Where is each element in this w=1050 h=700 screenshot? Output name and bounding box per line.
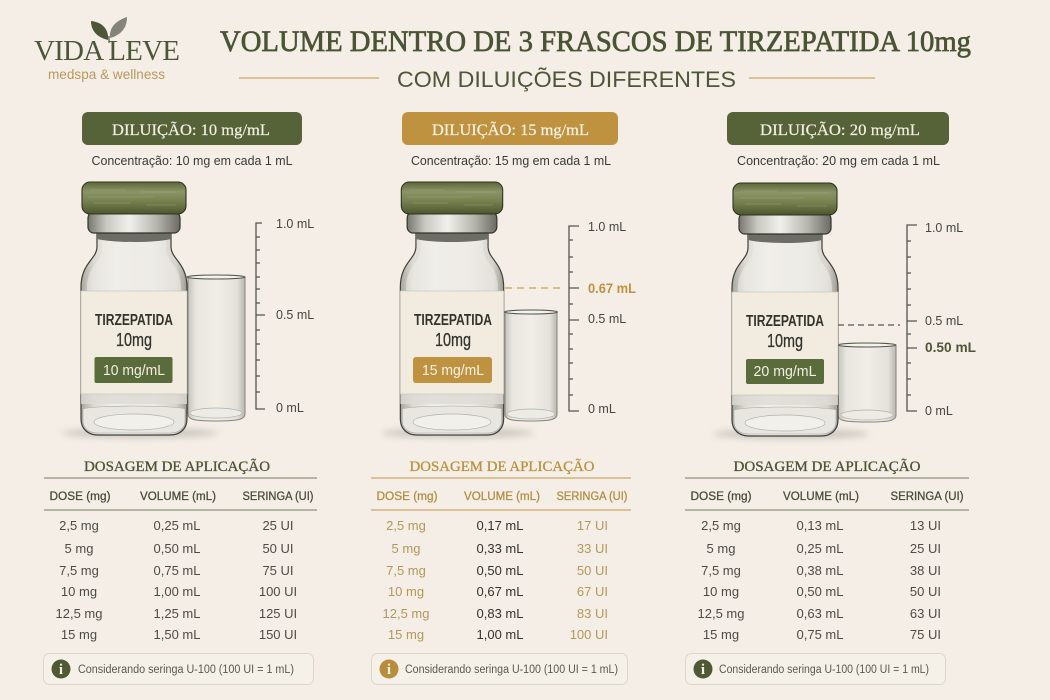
icon: info: i bbox=[387, 662, 391, 678]
panel: dilution 15 mg/mL bbox=[371, 112, 636, 684]
table rows: 0,63 mL bbox=[797, 606, 843, 621]
concentration text: Concentração: 15 mg em cada 1 mL bbox=[411, 154, 611, 168]
icon: info: i bbox=[59, 662, 63, 678]
table rows: 50 UI bbox=[910, 584, 941, 599]
volume scale: 0.50 mL bbox=[925, 340, 976, 355]
table rows: 10 mg bbox=[703, 584, 739, 599]
concentration text: Concentração: 10 mg em cada 1 mL bbox=[92, 154, 293, 168]
table rows: 75 UI bbox=[262, 563, 294, 578]
table rows: 0,25 mL bbox=[797, 541, 843, 556]
note: syringe: Considerando seringa U-100 (100 UI = 1 mL) bbox=[78, 664, 294, 676]
concentration text: Concentração: 20 mg em cada 1 mL bbox=[737, 154, 940, 168]
table rows bbox=[383, 518, 608, 642]
panel: dilution 10 mg/mL bbox=[44, 112, 317, 684]
table rows: 15 mg bbox=[61, 627, 97, 642]
table rows: 0,75 mL bbox=[154, 563, 200, 578]
table rows: 125 UI bbox=[259, 606, 297, 621]
brand tagline: medspa & wellness bbox=[48, 66, 165, 82]
vial label bbox=[94, 312, 173, 383]
table rows: 12,5 mg bbox=[383, 606, 429, 621]
table rows: 0,50 mL bbox=[477, 563, 523, 578]
volume scale: 1.0 mL bbox=[276, 217, 314, 231]
table rows: 75 UI bbox=[910, 627, 941, 642]
vial label: TIRZEPATIDA bbox=[746, 313, 824, 330]
table header: DOSE (mg) bbox=[50, 491, 111, 503]
table rows: 100 UI bbox=[570, 627, 608, 642]
table title: DOSAGEM DE APLICAÇÃO bbox=[84, 459, 270, 475]
table rows: 33 UI bbox=[577, 541, 608, 556]
table rows: 0,83 mL bbox=[477, 606, 523, 621]
volume scale: 1.0 mL bbox=[925, 221, 963, 235]
note: syringe bbox=[44, 654, 314, 684]
table rows: 5 mg bbox=[707, 541, 735, 556]
volume scale: 0 mL bbox=[276, 401, 304, 415]
title: VOLUME DENTRO DE 3 FRASCOS DE TIRZEPATIDA 10mg bbox=[220, 25, 971, 58]
table rows: 0,38 mL bbox=[797, 563, 843, 578]
brand name: VIDA LEVE bbox=[34, 35, 180, 67]
table rows: 25 UI bbox=[262, 518, 294, 533]
table rows: 0,25 mL bbox=[154, 518, 200, 533]
icon: leaves bbox=[91, 17, 127, 43]
table rows: 25 UI bbox=[910, 541, 941, 556]
dilution heading bbox=[82, 112, 302, 145]
table rows: 2,5 mg bbox=[59, 518, 99, 533]
vial label: 10 mg/mL bbox=[103, 362, 165, 379]
icon: info bbox=[380, 660, 398, 678]
volume scale bbox=[907, 221, 976, 418]
icon: info bbox=[694, 660, 712, 678]
vial label: 10mg bbox=[116, 330, 152, 350]
volume scale: 0.5 mL bbox=[588, 312, 626, 326]
icon: info: i bbox=[701, 662, 705, 678]
beaker bbox=[187, 275, 245, 421]
table rows: 15 mg bbox=[388, 627, 424, 642]
table title: DOSAGEM DE APLICAÇÃO bbox=[734, 459, 920, 475]
vial label: 10mg bbox=[767, 331, 803, 351]
dilution heading: DILUIÇÃO: 15 mg/mL bbox=[432, 121, 589, 139]
volume scale: 1.0 mL bbox=[588, 220, 626, 234]
table header: VOLUME (mL) bbox=[140, 491, 216, 503]
dosage table bbox=[44, 459, 317, 642]
table rows: 0,17 mL bbox=[477, 518, 523, 533]
table header: VOLUME (mL) bbox=[464, 491, 540, 503]
vial label: TIRZEPATIDA bbox=[414, 312, 492, 329]
table rows: 50 UI bbox=[577, 563, 608, 578]
table rows: 10 mg bbox=[388, 584, 424, 599]
table rows: 0,67 mL bbox=[477, 584, 523, 599]
volume scale: 0.67 mL bbox=[588, 281, 636, 296]
panel: dilution 20 mg/mL bbox=[685, 112, 976, 684]
table rows: 12,5 mg bbox=[56, 606, 102, 621]
dashed level line bbox=[838, 324, 900, 326]
vial bbox=[382, 182, 534, 438]
vial bbox=[713, 183, 869, 439]
volume scale: 0.5 mL bbox=[276, 308, 314, 322]
dilution heading: DILUIÇÃO: 10 mg/mL bbox=[112, 121, 270, 139]
table rows: 17 UI bbox=[577, 518, 608, 533]
subtitle: COM DILUIÇÕES DIFERENTES bbox=[397, 67, 736, 92]
table rows: 2,5 mg bbox=[701, 518, 741, 533]
volume scale: 0 mL bbox=[925, 404, 953, 418]
table header bbox=[690, 491, 964, 503]
note: syringe bbox=[686, 654, 946, 684]
dilution heading bbox=[402, 112, 618, 145]
table rows: 7,5 mg bbox=[59, 563, 99, 578]
table rows: 7,5 mg bbox=[386, 563, 426, 578]
table rows: 1,00 mL bbox=[477, 627, 523, 642]
table rows: 67 UI bbox=[577, 584, 608, 599]
vial label bbox=[746, 313, 824, 384]
dosage table bbox=[685, 459, 969, 642]
table header bbox=[50, 491, 314, 503]
table rows: 1,00 mL bbox=[154, 584, 200, 599]
vial label: 20 mg/mL bbox=[754, 363, 816, 380]
note: syringe: Considerando seringa U-100 (100 UI = 1 mL) bbox=[719, 664, 929, 676]
table rows: 7,5 mg bbox=[701, 563, 741, 578]
table header: SERINGA (UI) bbox=[556, 491, 628, 503]
volume scale: 0 mL bbox=[588, 402, 616, 416]
table header bbox=[376, 491, 628, 503]
table rows: 0,75 mL bbox=[797, 627, 843, 642]
volume scale bbox=[569, 220, 636, 416]
volume scale bbox=[256, 217, 314, 415]
volume scale: 0.5 mL bbox=[925, 314, 963, 328]
table rows: 38 UI bbox=[910, 563, 941, 578]
table rows: 0,13 mL bbox=[797, 518, 843, 533]
vial label: 15 mg/mL bbox=[422, 362, 484, 379]
logo: Vida Leve bbox=[34, 17, 180, 82]
table rows: 5 mg bbox=[65, 541, 93, 556]
vial bbox=[62, 182, 218, 438]
table rows: 1,25 mL bbox=[154, 606, 200, 621]
table rows: 0,50 mL bbox=[154, 541, 200, 556]
vial label bbox=[413, 312, 492, 383]
beaker bbox=[838, 343, 896, 422]
table rows: 10 mg bbox=[61, 584, 97, 599]
table rows: 0,50 mL bbox=[797, 584, 843, 599]
dilution heading bbox=[727, 112, 949, 145]
table title: DOSAGEM DE APLICAÇÃO bbox=[410, 459, 594, 475]
table rows: 2,5 mg bbox=[386, 518, 426, 533]
beaker bbox=[504, 310, 558, 421]
table rows: 1,50 mL bbox=[154, 627, 200, 642]
vial label: 10mg bbox=[435, 330, 471, 350]
table rows: 83 UI bbox=[577, 606, 608, 621]
table rows bbox=[56, 518, 297, 642]
icon: info bbox=[52, 660, 70, 678]
table rows: 100 UI bbox=[259, 584, 297, 599]
table rows: 13 UI bbox=[910, 518, 941, 533]
table header: SERINGA (UI) bbox=[242, 491, 314, 503]
table rows: 12,5 mg bbox=[698, 606, 744, 621]
table header: VOLUME (mL) bbox=[783, 491, 859, 503]
table rows: 15 mg bbox=[703, 627, 739, 642]
vial label: TIRZEPATIDA bbox=[95, 312, 173, 329]
table rows bbox=[698, 518, 941, 642]
note: syringe: Considerando seringa U-100 (100 UI = 1 mL) bbox=[405, 664, 618, 676]
table rows: 0,33 mL bbox=[477, 541, 523, 556]
table header: DOSE (mg) bbox=[690, 491, 752, 503]
table rows: 5 mg bbox=[392, 541, 420, 556]
table header: DOSE (mg) bbox=[376, 491, 438, 503]
table header: SERINGA (UI) bbox=[890, 491, 964, 503]
table rows: 63 UI bbox=[910, 606, 941, 621]
dosage table bbox=[371, 459, 631, 642]
note: syringe bbox=[372, 654, 628, 684]
dashed level line bbox=[505, 287, 560, 289]
dilution heading: DILUIÇÃO: 20 mg/mL bbox=[760, 121, 920, 139]
table rows: 150 UI bbox=[259, 627, 297, 642]
table rows: 50 UI bbox=[262, 541, 294, 556]
